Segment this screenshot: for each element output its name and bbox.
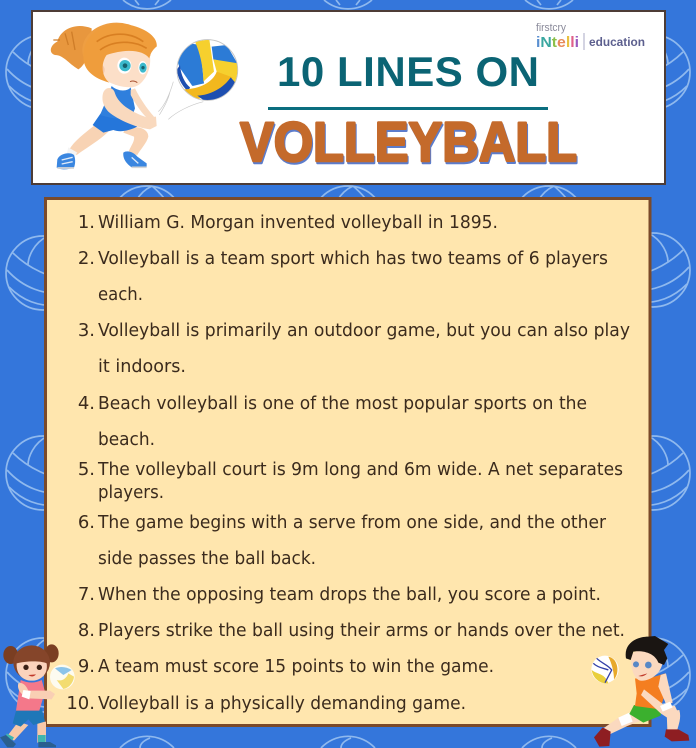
arm [658,673,673,705]
shorts [629,705,662,723]
numbered list: Volleyball is primarily an outdoor game, but you can also play [98,320,630,341]
icon: boy player with ball [591,636,689,747]
face [98,48,150,87]
numbers: 10. [66,693,95,714]
legs [7,722,28,741]
numbered list: side passes the ball back. [98,548,316,569]
panel: facts [46,198,650,726]
shirt [16,680,45,711]
icon: small girl with ball [0,644,75,747]
shorts [93,113,138,133]
numbers: 1. [78,212,95,233]
shirt [635,673,667,709]
numbered list: The game begins with a serve from one side, and the other [97,512,607,533]
icon: girl player with volleyball [51,23,238,169]
numbered list: it indoors. [98,356,186,377]
shoes [57,153,75,169]
logo [536,22,645,51]
logo: firstcry [536,22,566,34]
numbered list: Volleyball is a team sport which has two teams of 6 players [98,248,608,269]
numbered list: Players strike the ball using their arms or hands over the net. [98,620,625,641]
head [631,649,663,681]
numbered list: players. [98,482,164,503]
arms [131,88,154,119]
numbered list: Volleyball is a physically demanding game. [98,693,466,714]
motion lines [158,82,203,119]
ball [591,656,619,683]
numbers [66,212,95,714]
logo: education [589,35,645,49]
numbered list: Beach volleyball is one of the most popular sports on the [98,393,587,414]
title rule [268,107,548,110]
eyes [117,58,131,74]
hair [51,26,92,69]
numbered list: each. [98,284,143,305]
ball [50,665,75,689]
numbers: 9. [78,656,95,677]
numbers: 3. [78,320,95,341]
numbered list: William G. Morgan invented volleyball in 1895. [98,212,498,233]
volleyball [175,39,238,100]
numbered list: A team must score 15 points to win the game. [98,656,494,677]
logo: iNtelli [536,34,579,51]
numbers: 4. [78,393,95,414]
numbers: 2. [78,248,95,269]
numbers: 5. [78,459,95,480]
numbers: 6. [78,512,95,533]
numbered list: beach. [98,429,155,450]
legs [69,125,108,155]
numbered list [66,212,630,714]
shorts [13,708,45,727]
shirt [100,86,135,119]
title: volleyball: VOLLEYBALL [240,110,577,173]
numbers: 8. [78,620,95,641]
hair [626,636,668,665]
numbers: 7. [78,584,95,605]
title: volleyball: VOLLEYBALL [241,112,578,175]
back leg [603,710,647,735]
arm [18,683,55,699]
title: 10 lines on: 10 LINES ON [277,48,539,95]
pigtails [3,646,18,664]
numbered list: The volleyball court is 9m long and 6m wide. A net separates [97,459,623,480]
numbered list: When the opposing team drops the ball, you score a point. [98,584,601,605]
head [13,645,50,680]
